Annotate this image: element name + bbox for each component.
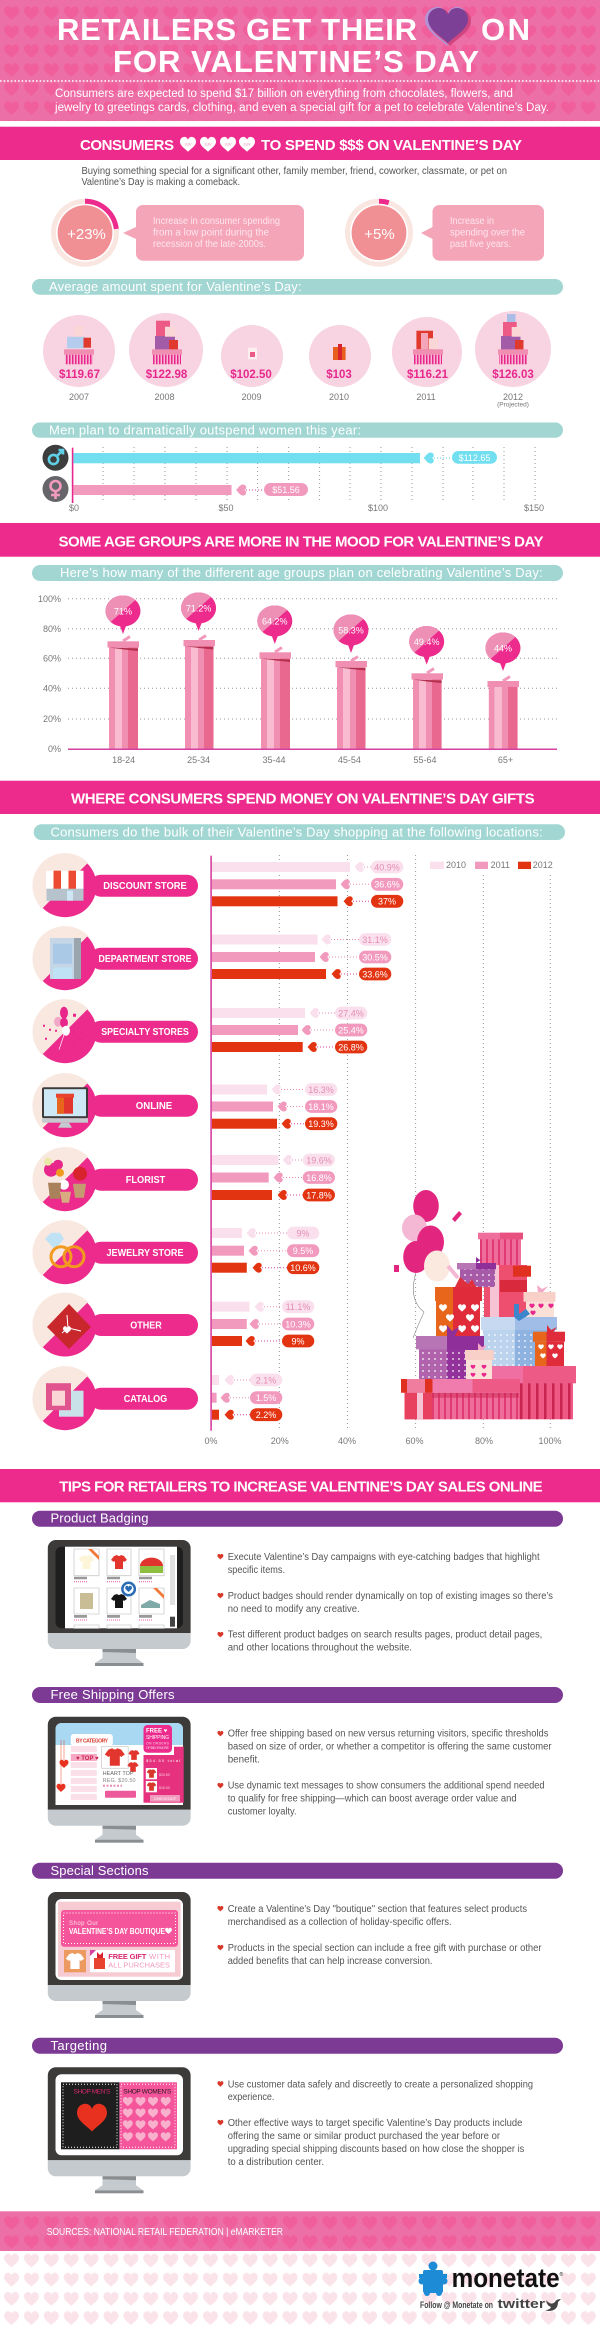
- stat: +23%: from a low point during the: [153, 228, 269, 238]
- store label: [32, 1220, 198, 1284]
- axis labels: $100: [368, 503, 388, 513]
- store label: ONLINE: [136, 1101, 173, 1112]
- tips: targeting: Use customer data safely and discreetly to create a personalized shopping: [228, 2079, 533, 2090]
- bars: 31.1%: [362, 935, 388, 945]
- small cream box: [465, 1343, 494, 1379]
- y-axis labels: 100%: [38, 594, 61, 604]
- monetate logo: [418, 2262, 564, 2311]
- tips: product badging: Product badges should render dynamically on top of existing images so there’s: [228, 1591, 553, 1602]
- paragraph: [82, 166, 507, 188]
- tips: product badging: and other locations throughout the website.: [228, 1643, 412, 1654]
- tips: product badging: Execute Valentine’s Day campaigns with eye-catching badges that highlight: [228, 1552, 540, 1563]
- monitor: free shipping: ON ORDERS: [146, 1742, 170, 1746]
- tips: special sections: Products in the special section can include a free gift with purchase or other: [228, 1943, 542, 1954]
- chart: age groups: [38, 592, 557, 804]
- tips: free shipping: to qualify for free shipping—which can boost average order value and: [228, 1794, 517, 1805]
- row: other: [32, 1292, 314, 1356]
- tips: product badging: specific items.: [228, 1565, 285, 1576]
- tips: special sections: Create a Valentine’s Day "boutique" section that features select products: [228, 1904, 527, 1915]
- section band: consumers love to spend: [0, 127, 600, 160]
- column 45-54: [333, 614, 368, 787]
- bar: men: $112.65: [459, 453, 490, 463]
- row: department store: [32, 926, 391, 990]
- orange heart box: [435, 1287, 482, 1336]
- bars: 9%: [296, 1228, 310, 1238]
- title: ON: [481, 12, 530, 47]
- bars: [212, 1227, 319, 1274]
- x-axis labels: 100%: [538, 1436, 562, 1446]
- monetate logo: ®: [560, 2271, 564, 2278]
- row: online: [32, 1073, 337, 1137]
- legend: [430, 860, 553, 870]
- column 65+: 65+: [498, 755, 513, 765]
- bars: 33.6%: [362, 969, 388, 979]
- tips: targeting: Other effective ways to target specific Valentine’s Day products include: [228, 2118, 523, 2129]
- 2012: 2012: [503, 392, 523, 402]
- y-axis labels: 20%: [43, 714, 61, 724]
- store label: DEPARTMENT STORE: [98, 954, 192, 965]
- column 35-44: 35-44: [262, 755, 286, 765]
- monitor: free shipping: FREE ♥: [146, 1728, 168, 1734]
- column 18-24: [105, 595, 140, 767]
- chart: average spend by year: [43, 311, 551, 408]
- bars: [212, 933, 391, 980]
- section band: tips: TIPS FOR RETAILERS TO INCREASE VALENTINE’S DAY SALES ONLINE: [59, 1479, 543, 1496]
- monitor: free shipping: SHIPPING: [146, 1735, 169, 1741]
- bars: 36.6%: [374, 880, 400, 890]
- section band: tips: [0, 1469, 600, 1502]
- column 18-24: 18-24: [112, 755, 135, 765]
- red bow: [455, 1277, 476, 1287]
- tips: free shipping: Offer free shipping based on new versus returning visitors, specific thresholds: [228, 1729, 548, 1740]
- row: discount store: [32, 853, 403, 917]
- legend: 2010: [446, 860, 466, 870]
- legend: 2011: [491, 860, 510, 870]
- store label: JEWELRY STORE: [106, 1248, 184, 1259]
- bars: 16.8%: [306, 1173, 332, 1183]
- axis labels: $50: [218, 503, 234, 513]
- monitor: free shipping: OF $50 OR MORE: [146, 1746, 170, 1750]
- bars: 9.5%: [293, 1246, 313, 1256]
- footer sources band: SOURCES: NATIONAL RETAIL FEDERATION | eMARKETER: [47, 2226, 283, 2238]
- section band: age groups: SOME AGE GROUPS ARE MORE IN THE MOOD FOR VALENTINE’S DAY: [58, 534, 544, 551]
- heading bar: average amount: Average amount spent for Valentine’s Day:: [49, 279, 302, 294]
- legend: 2012: [533, 860, 553, 870]
- bars: 18.1%: [308, 1102, 334, 1112]
- y-axis labels: 40%: [43, 684, 61, 694]
- bars: 40.9%: [374, 862, 400, 872]
- tips: special sections: merchandised as a collection of holiday-specific offers.: [228, 1917, 452, 1928]
- tips: targeting: offering the same or similar product purchased the year before or: [228, 2131, 501, 2142]
- store label: CATALOG: [124, 1394, 167, 1405]
- tip heading: targeting: Targeting: [50, 2038, 107, 2053]
- purple top box: [457, 1257, 496, 1287]
- intro text: Consumers are expected to spend $17 billion on everything from chocolates, flowers, and: [55, 88, 513, 100]
- bars: 27.4%: [338, 1008, 364, 1018]
- 2007: [43, 315, 115, 402]
- bars: 9%: [291, 1336, 305, 1346]
- monitor: targeting: SHOP WOMEN’S: [123, 2088, 172, 2095]
- store label: [32, 1073, 198, 1137]
- heading bar: age groups: Here’s how many of the different age groups plan on celebrating Valentine’s Day:: [60, 565, 543, 580]
- stat: +5%: +5%: [364, 226, 395, 243]
- footer sources band: [0, 2211, 600, 2251]
- tips: product badging: Test different product badges on search results pages, product detail pages,: [228, 1630, 542, 1641]
- icon: four LUV hearts: [180, 137, 255, 152]
- tips: targeting: experience.: [228, 2092, 274, 2103]
- balloons: [394, 1190, 462, 1338]
- icon: purple heart: [425, 7, 471, 46]
- bars: 19.3%: [308, 1119, 334, 1129]
- icon: twitter bird: [545, 2299, 561, 2311]
- y-axis labels: 0%: [48, 744, 61, 754]
- monitor: special sections: FREE GIFT: [108, 1952, 147, 1961]
- bars: 16.3%: [308, 1085, 334, 1095]
- bars: [212, 1374, 282, 1421]
- section band: where consumers spend: WHERE CONSUMERS SPEND MONEY ON VALENTINE’S DAY GIFTS: [71, 790, 535, 808]
- monitor: special sections: Shop Our: [69, 1921, 99, 1927]
- store label: [32, 1366, 198, 1430]
- icon: four LUV hearts: LUV: [225, 142, 232, 146]
- bars: [212, 1154, 335, 1201]
- purple box: [416, 1325, 484, 1379]
- bar: women: $51.56: [272, 485, 300, 495]
- store label: [32, 926, 198, 990]
- 2010: [309, 325, 371, 402]
- title: RETAILERS GET THEIR: [57, 12, 417, 47]
- icon: four LUV hearts: LUV: [205, 142, 212, 146]
- 2010: 2010: [329, 392, 349, 402]
- chart: men vs women spending: [42, 445, 544, 513]
- monitor: free shipping: $20.50: [159, 1773, 170, 1777]
- cream box: [524, 1285, 556, 1317]
- monitor: free shipping: HEART TOP: [103, 1771, 134, 1777]
- bars: 2.2%: [256, 1410, 276, 1420]
- 2010: $103: [326, 369, 352, 381]
- monitor: free shipping: REG. $20.50: [103, 1778, 136, 1784]
- monitor: free shipping: CHECKOUT: [154, 1796, 177, 1801]
- x-axis labels: 20%: [271, 1436, 289, 1446]
- y-axis labels: [38, 594, 61, 754]
- store label: OTHER: [130, 1320, 162, 1332]
- monetate logo: monetate: [452, 2263, 560, 2293]
- 2009: [221, 325, 283, 402]
- tips: product badging: no need to modify any creative.: [228, 1604, 360, 1615]
- 2012: (Projected): [497, 402, 529, 408]
- header banner: [0, 0, 600, 121]
- icon: female: [42, 476, 68, 502]
- 2009: $102.50: [230, 369, 272, 381]
- stat: +23%: +23%: [67, 226, 106, 243]
- bars: [212, 1083, 337, 1130]
- bars: 2.1%: [256, 1375, 276, 1385]
- store label: [32, 853, 198, 917]
- icon: four LUV hearts: LUV: [244, 142, 251, 146]
- section band: age groups: [0, 523, 600, 557]
- bottom big box: [401, 1379, 520, 1419]
- tip heading: targeting: [32, 2038, 563, 2054]
- tips: free shipping: benefit.: [228, 1755, 260, 1766]
- icon: male: [42, 445, 68, 471]
- x-axis labels: 40%: [338, 1436, 356, 1446]
- icon: puzzle piece: [418, 2262, 448, 2296]
- axis labels: [69, 503, 544, 513]
- column 18-24: 71%: [114, 606, 132, 616]
- row: catalog: [32, 1366, 282, 1430]
- tip heading: product badging: [32, 1511, 563, 1527]
- bar: men: [73, 451, 497, 464]
- bars: 10.6%: [290, 1263, 316, 1273]
- tip heading: free shipping: [32, 1687, 563, 1703]
- monitor: targeting: SHOP MEN’S: [74, 2088, 111, 2095]
- monitor: special sections: ALL PURCHASES: [108, 1960, 170, 1969]
- chart grid lines: [210, 855, 550, 1431]
- x-axis labels: 80%: [475, 1436, 493, 1446]
- bars: 11.1%: [286, 1302, 310, 1312]
- stat: +5%: [345, 199, 544, 267]
- section band: consumers love to spend: TO SPEND $$$ ON VALENTINE’S DAY: [261, 137, 522, 154]
- monitor: special sections: VALENTINE’S DAY BOUTIQUE: [69, 1927, 166, 1936]
- monetate logo: Follow @ Monetate on: [420, 2300, 493, 2310]
- row: florist: [32, 1147, 335, 1211]
- section band: where consumers spend: [0, 781, 600, 814]
- heading bar: men outspend women: [32, 422, 563, 438]
- stat: +23%: recession of the late-2000s.: [153, 239, 266, 250]
- heading bar: shopping locations: Consumers do the bulk of their Valentine’s Day shopping at the following locations:: [50, 825, 543, 840]
- bars: 25.4%: [338, 1025, 364, 1035]
- stat: +23%: [51, 199, 304, 267]
- tip heading: free shipping: Free Shipping Offers: [50, 1687, 175, 1702]
- tips: special sections: added benefits that can help increase conversion.: [228, 1956, 432, 1967]
- intro text: [54, 88, 549, 114]
- column 55-64: [409, 626, 444, 800]
- bars: 30.5%: [362, 952, 388, 962]
- y-axis labels: 80%: [43, 624, 61, 634]
- 2011: [392, 317, 462, 402]
- blue box: [481, 1304, 557, 1366]
- bars: 17.8%: [306, 1190, 332, 1200]
- x-axis labels: 60%: [405, 1436, 424, 1446]
- column 55-64: 55-64: [413, 755, 437, 765]
- bars: 10.3%: [285, 1319, 311, 1329]
- store label: SPECIALTY STORES: [101, 1027, 189, 1038]
- monitor: targeting: [48, 2067, 191, 2193]
- monitor: free shipping: [48, 1717, 191, 1843]
- large pink lid and body: [492, 1366, 576, 1419]
- stat: +23%: Increase in consumer spending: [153, 216, 280, 227]
- monitor: free shipping: $15.00: [159, 1786, 170, 1790]
- tips: special sections: [217, 1904, 542, 1967]
- illustration: balloons and gift pile: [394, 1190, 576, 1419]
- monitor: special sections: WITH: [149, 1952, 170, 1961]
- tips: product badging: [217, 1552, 553, 1654]
- bars: 37%: [378, 897, 396, 907]
- red back box: [484, 1265, 531, 1317]
- monitor: free shipping: ♥ TOP ♥: [76, 1756, 99, 1762]
- column 25-34: 25-34: [187, 755, 210, 765]
- paragraph: Buying something special for a significant other, family member, friend, coworker, classmate, or pet on: [82, 166, 507, 177]
- monitor: free shipping: $54.50 total: [146, 1758, 180, 1763]
- small orange box: [533, 1325, 565, 1366]
- column 35-44: [257, 605, 292, 778]
- 2007: 2007: [69, 392, 89, 402]
- intro text: jewelry to greetings cards, clothing, and even a special gift for a pet to celebrate Valentine’s Day.: [54, 102, 549, 114]
- stat: +5%: past five years.: [450, 239, 511, 250]
- monitor: product badging: [48, 1540, 191, 1666]
- column 65+: [485, 632, 520, 804]
- title: [57, 12, 530, 79]
- tips: targeting: to a distribution center.: [228, 2157, 324, 2168]
- column 65+: 44%: [494, 644, 512, 654]
- tip heading: special sections: Special Sections: [50, 1863, 149, 1878]
- bars: 19.6%: [306, 1155, 332, 1165]
- row: jewelry store: [32, 1220, 319, 1284]
- heading bar: men outspend women: Men plan to dramatically outspend women this year:: [49, 422, 361, 438]
- bars: [212, 1300, 314, 1347]
- 2012: $126.03: [492, 369, 534, 381]
- 2009: 2009: [241, 392, 262, 402]
- tips: free shipping: [217, 1729, 552, 1817]
- x-axis labels: [204, 1436, 562, 1446]
- paragraph: Valentine’s Day is making a comeback.: [82, 177, 240, 188]
- store label: [32, 1147, 198, 1211]
- column 25-34: [181, 592, 216, 766]
- axis labels: $150: [524, 503, 544, 513]
- store label: DISCOUNT STORE: [103, 881, 187, 892]
- 2007: $119.67: [59, 369, 100, 381]
- bar: women: [73, 483, 308, 496]
- store label: FLORIST: [126, 1175, 165, 1186]
- icon: four LUV hearts: LUV: [185, 142, 192, 146]
- heading bar: average amount: [32, 279, 563, 295]
- column 55-64: 49.4%: [414, 637, 439, 647]
- 2011: $116.21: [407, 369, 449, 381]
- 2008: [129, 313, 203, 402]
- monetate logo: twitter: [498, 2296, 545, 2311]
- tip heading: product badging: Product Badging: [50, 1511, 148, 1526]
- tips: free shipping: Use dynamic text messages to show consumers the additional spend needed: [228, 1781, 545, 1792]
- monitor: free shipping: BY CATEGORY: [76, 1738, 109, 1744]
- monitor: special sections: [48, 1892, 191, 2018]
- y-axis labels: 60%: [43, 654, 61, 664]
- column 35-44: 64.2%: [262, 616, 288, 626]
- tips: targeting: upgrading special shipping discounts based on how close the shopper is: [228, 2144, 524, 2155]
- stat: +5%: spending over the: [450, 228, 525, 238]
- axis labels: $0: [69, 503, 79, 513]
- store label: [32, 999, 198, 1063]
- section band: consumers love to spend: CONSUMERS: [80, 137, 174, 154]
- column 45-54: 45-54: [338, 755, 361, 765]
- bars: 1.5%: [256, 1393, 276, 1403]
- tips: free shipping: based on size of order, or whether a competitor is offering the same customer: [228, 1742, 552, 1753]
- store label: [32, 1292, 198, 1356]
- x-axis labels: 0%: [204, 1436, 218, 1446]
- bars: [212, 1007, 367, 1053]
- 2012: [475, 311, 551, 408]
- column 45-54: 58.3%: [338, 626, 364, 636]
- tips: targeting: [217, 2079, 533, 2168]
- tip heading: special sections: [32, 1863, 563, 1879]
- 2008: 2008: [154, 392, 175, 402]
- tips: free shipping: customer loyalty.: [228, 1806, 297, 1817]
- footer heart pattern: [0, 2251, 600, 2327]
- column 25-34: 71.2%: [186, 604, 211, 614]
- bars: 26.8%: [338, 1042, 364, 1052]
- tall pink box: [478, 1233, 523, 1269]
- bars: [212, 861, 403, 908]
- title: FOR VALENTINE’S DAY: [113, 44, 479, 79]
- 2008: $122.98: [146, 369, 188, 381]
- 2011: 2011: [416, 392, 436, 402]
- row: specialty stores: [32, 999, 367, 1063]
- stat: +5%: Increase in: [450, 216, 494, 227]
